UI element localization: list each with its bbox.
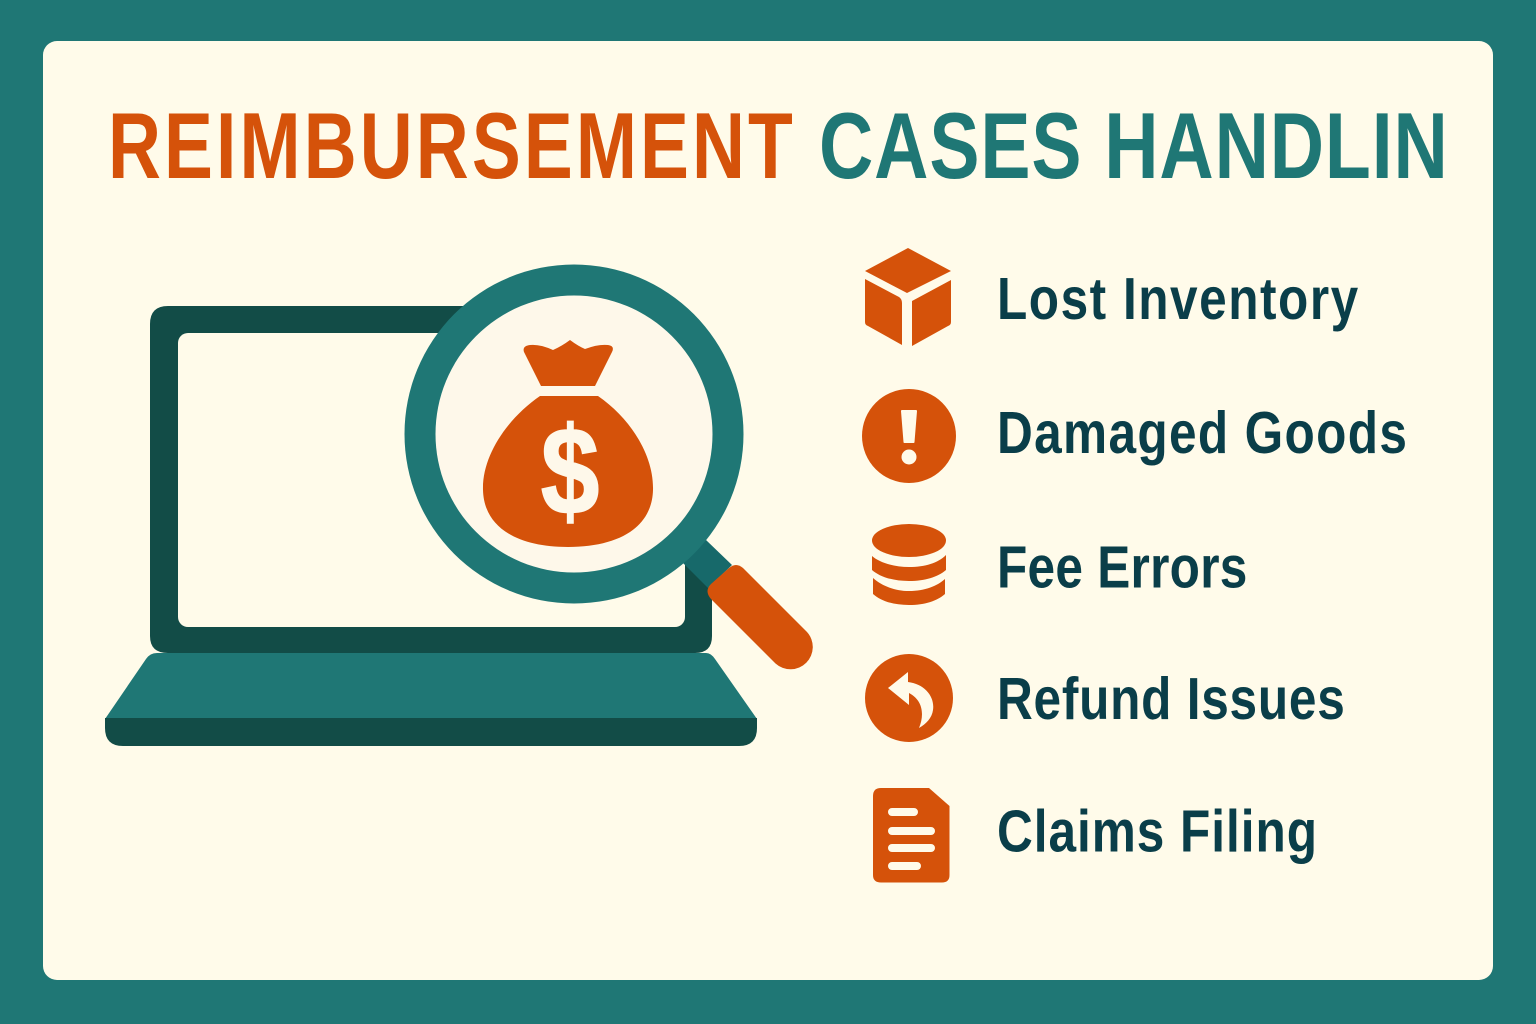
magnifier — [404, 264, 813, 669]
list item: Refund Issues: Refund Issues — [997, 666, 1345, 732]
list item: Fee Errors: Fee Errors — [997, 534, 1247, 600]
laptop screen — [150, 306, 712, 653]
title: CASES HANDLIN — [819, 94, 1448, 199]
icon: return arrow — [865, 654, 953, 742]
magnifier neck — [683, 540, 732, 588]
list item: Fee Errors — [872, 524, 1247, 605]
list item: Claims Filing — [873, 788, 1317, 882]
illustration: laptop with magnifier — [105, 264, 813, 746]
title — [108, 93, 1448, 199]
list item: Claims Filing: Claims Filing — [997, 798, 1317, 864]
magnifier ring — [404, 264, 744, 604]
magnifier lens — [436, 296, 712, 572]
magnifier handle — [708, 565, 813, 669]
icon: box — [865, 248, 951, 346]
list item: Refund Issues — [865, 654, 1345, 742]
icon: document — [873, 788, 950, 882]
icon: exclamation — [862, 389, 956, 483]
list item: Lost Inventory — [865, 248, 1358, 346]
laptop base — [105, 653, 757, 746]
list item: Damaged Goods: Damaged Goods — [997, 400, 1407, 466]
icon: stacked coins — [872, 524, 946, 605]
title: REIMBURSEMENT — [108, 93, 793, 198]
icon: money bag — [483, 340, 653, 547]
list item: Damaged Goods — [862, 389, 1407, 483]
list item: Lost Inventory: Lost Inventory — [997, 266, 1358, 332]
icon: money bag: $ — [541, 403, 599, 541]
